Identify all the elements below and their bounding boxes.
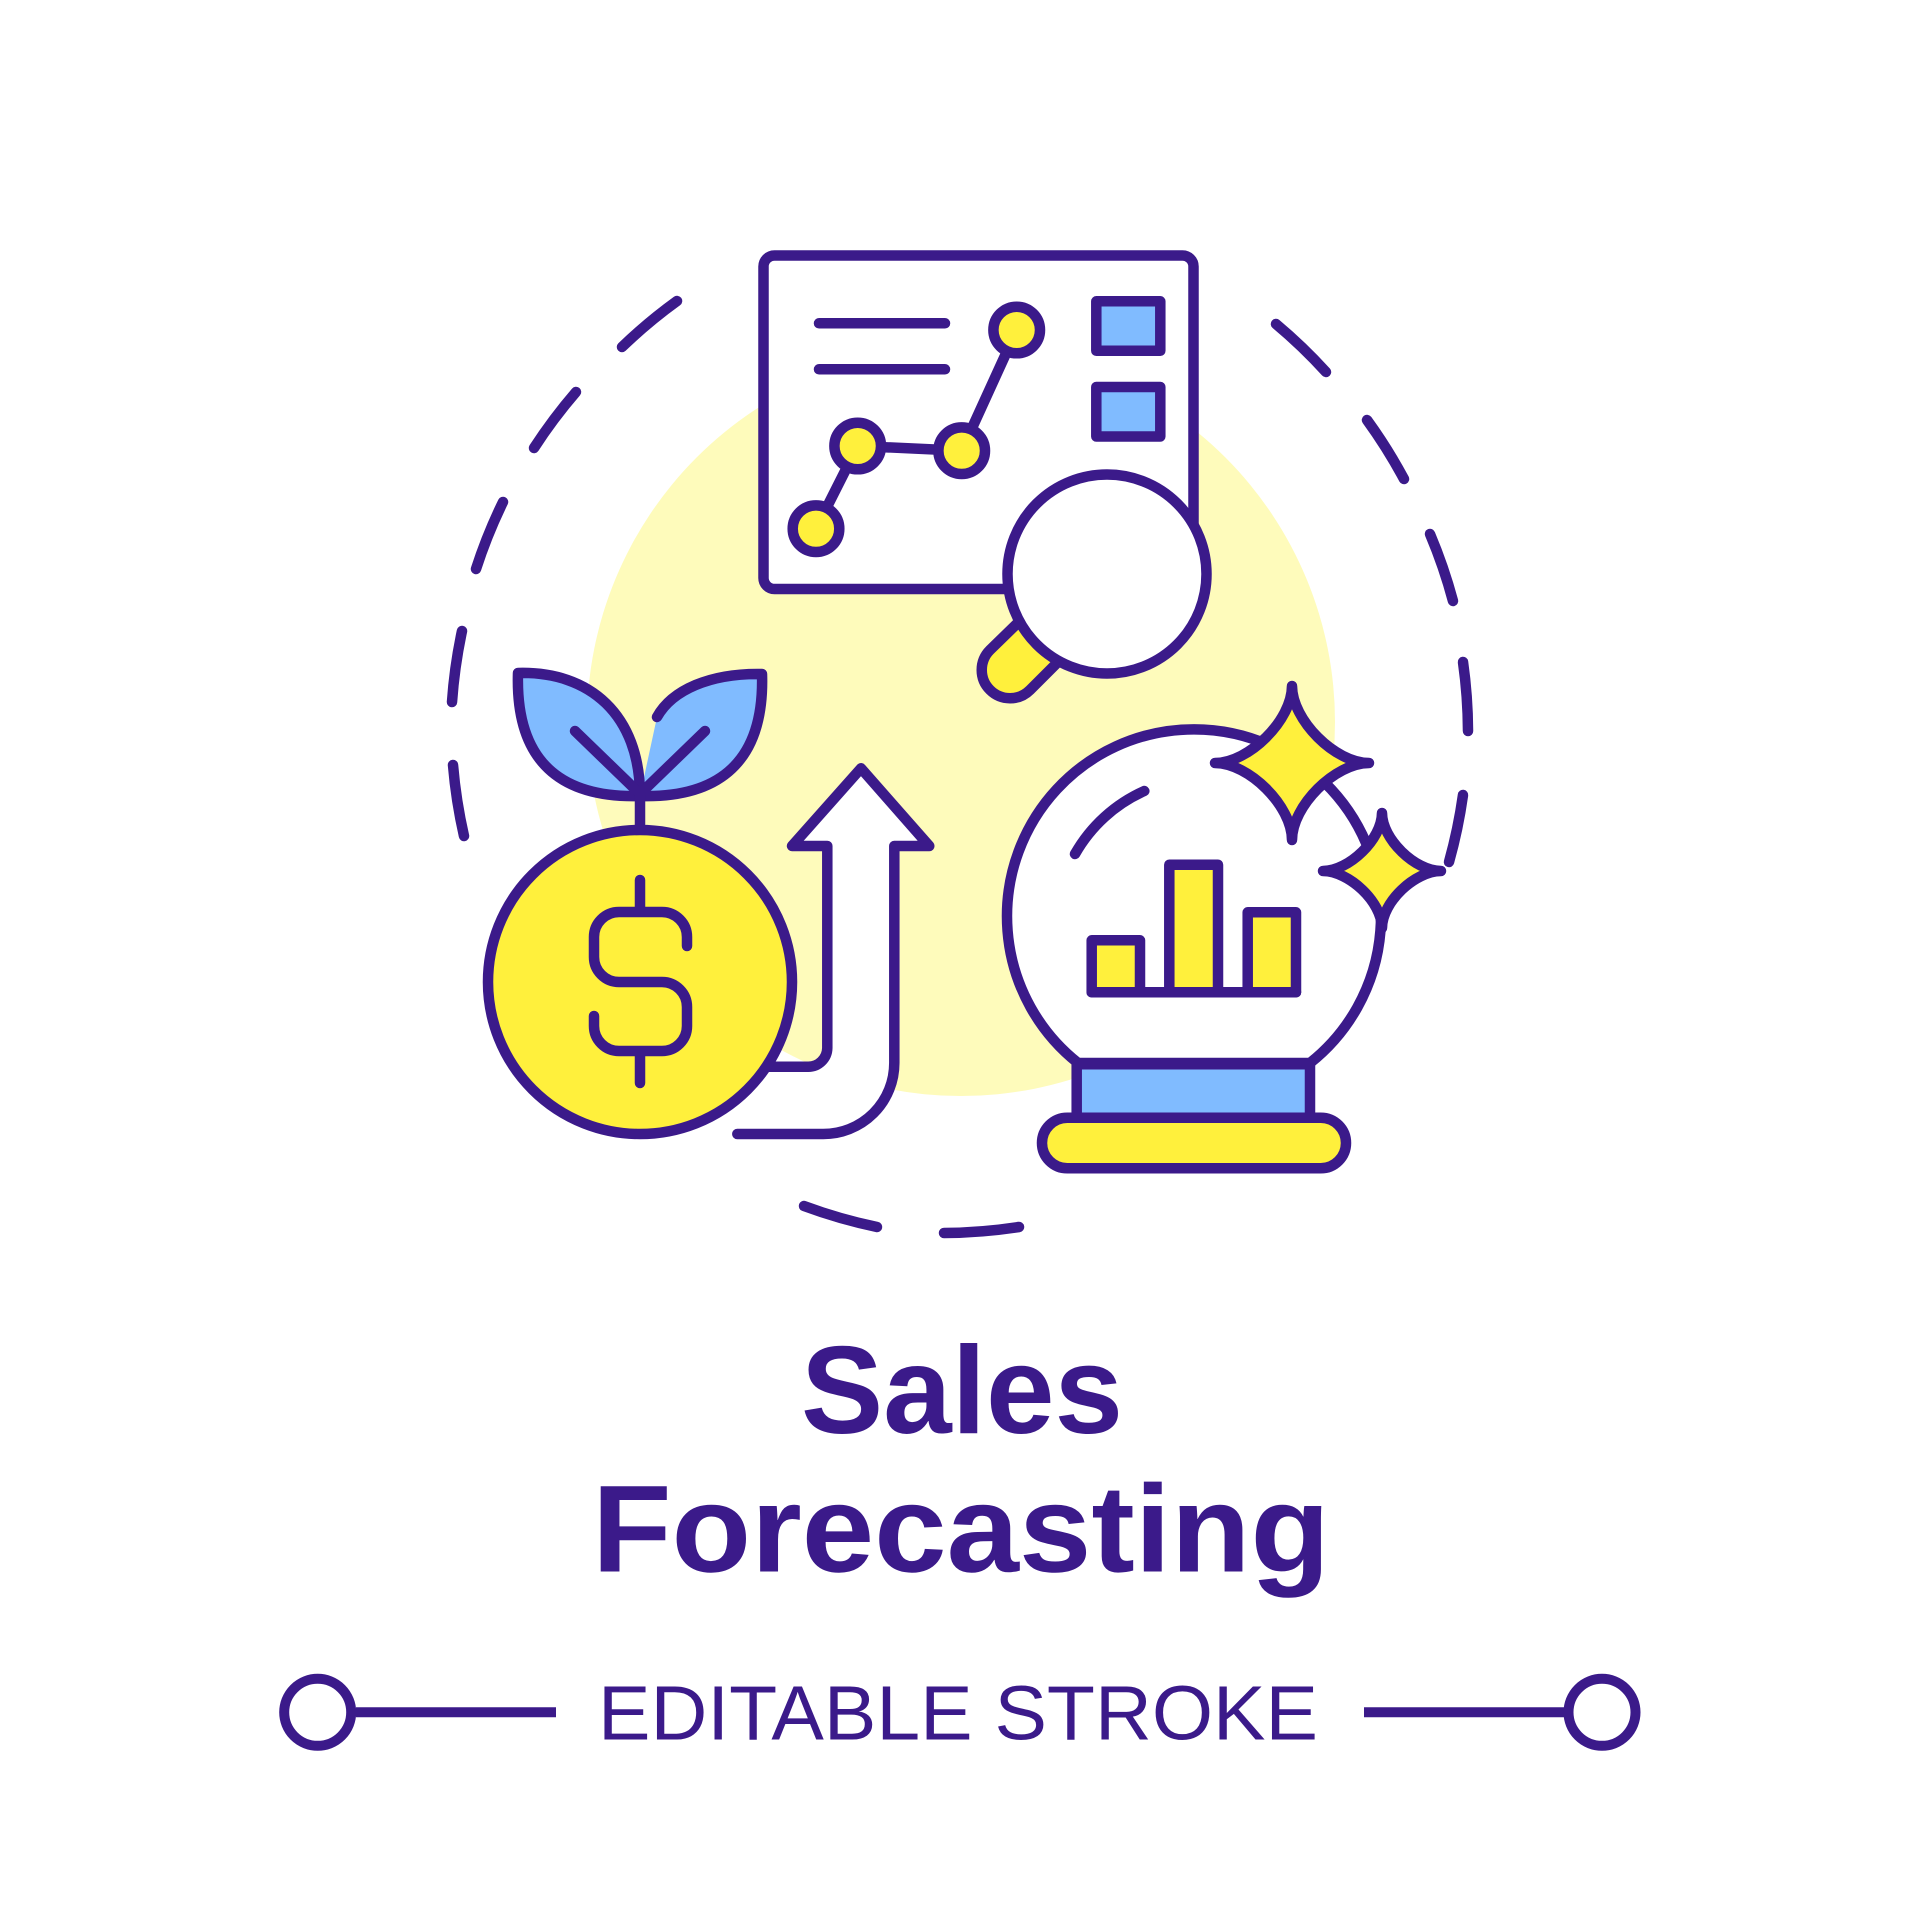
title bbox=[592, 1322, 1330, 1598]
large sparkle bbox=[1215, 686, 1369, 840]
right connector bbox=[1364, 1679, 1636, 1746]
legend squares bbox=[1096, 301, 1160, 436]
editable stroke label bbox=[284, 1670, 1636, 1756]
title: Forecasting bbox=[592, 1460, 1330, 1598]
coin bbox=[488, 830, 792, 1134]
left connector bbox=[284, 1679, 556, 1746]
stand collar bbox=[1077, 1064, 1310, 1118]
bar chart bbox=[1092, 865, 1296, 992]
small sparkle bbox=[1323, 813, 1441, 928]
title: Sales bbox=[801, 1322, 1123, 1460]
background circle bbox=[587, 348, 1335, 1096]
dashed ring bbox=[452, 301, 1468, 1233]
leaf veins and stem bbox=[575, 731, 705, 830]
icon: growth arrow bbox=[737, 768, 929, 1134]
magnifier lens bbox=[1008, 474, 1206, 674]
right leaf bbox=[640, 674, 762, 796]
icon: crystal ball with bar chart bbox=[1007, 686, 1441, 1168]
line chart bbox=[793, 307, 1040, 552]
caption: EDITABLE STROKE bbox=[598, 1670, 1318, 1756]
panel frame bbox=[764, 256, 1194, 589]
globe highlight bbox=[1075, 791, 1144, 854]
stand foot bbox=[1042, 1118, 1346, 1168]
dollar sign bbox=[594, 880, 687, 1083]
glass globe bbox=[1007, 729, 1381, 1063]
left leaf bbox=[518, 673, 640, 796]
icon: dollar coin with sprout bbox=[488, 673, 792, 1134]
magnifier handle bbox=[982, 611, 1070, 698]
text lines bbox=[819, 323, 945, 369]
icon: report panel with line chart and magnifier bbox=[764, 256, 1206, 698]
